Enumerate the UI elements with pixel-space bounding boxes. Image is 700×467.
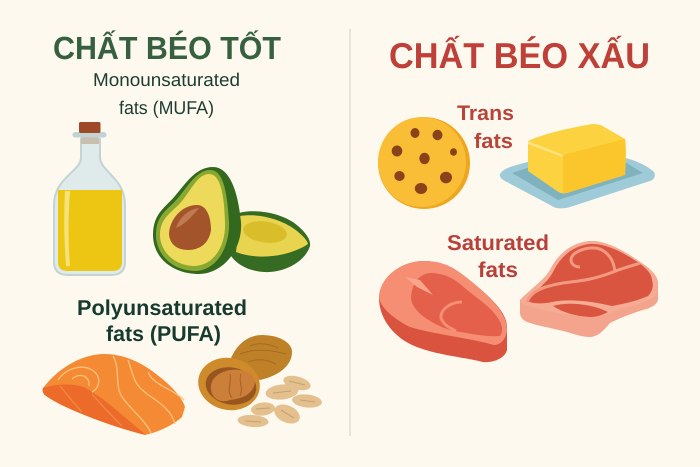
heading: trans fats: fats <box>474 130 513 153</box>
icon: almonds <box>237 373 323 428</box>
heading: polyunsaturated fats: Polyunsaturated <box>77 296 247 320</box>
panel: good fats <box>43 30 323 435</box>
heading: trans fats: Trans <box>457 102 514 125</box>
panel: bad fats <box>378 35 658 362</box>
icon: butter on dish <box>500 124 655 208</box>
heading: saturated fats <box>447 231 549 282</box>
icon: olive oil bottle <box>54 122 125 275</box>
icon: left meat steak <box>379 261 507 362</box>
icon: avocado <box>153 167 310 274</box>
heading: polyunsaturated fats <box>77 296 247 346</box>
icon: cookie <box>378 117 470 209</box>
title: bad fats: CHẤT BÉO XẤU <box>389 35 650 76</box>
icon: walnuts <box>193 335 292 416</box>
icon: salmon fillet <box>43 354 185 435</box>
heading: saturated fats: Saturated <box>447 231 549 255</box>
heading: monounsaturated fats: Monounsaturated <box>93 69 240 90</box>
title: good fats: CHẤT BÉO TỐT <box>53 30 281 66</box>
heading: monounsaturated fats <box>93 69 240 118</box>
heading: trans fats <box>457 102 514 153</box>
heading: saturated fats: fats <box>478 258 518 282</box>
heading: polyunsaturated fats: fats (PUFA) <box>106 322 221 346</box>
icon: right meat steak <box>520 241 658 337</box>
heading: monounsaturated fats: fats (MUFA) <box>119 97 214 118</box>
